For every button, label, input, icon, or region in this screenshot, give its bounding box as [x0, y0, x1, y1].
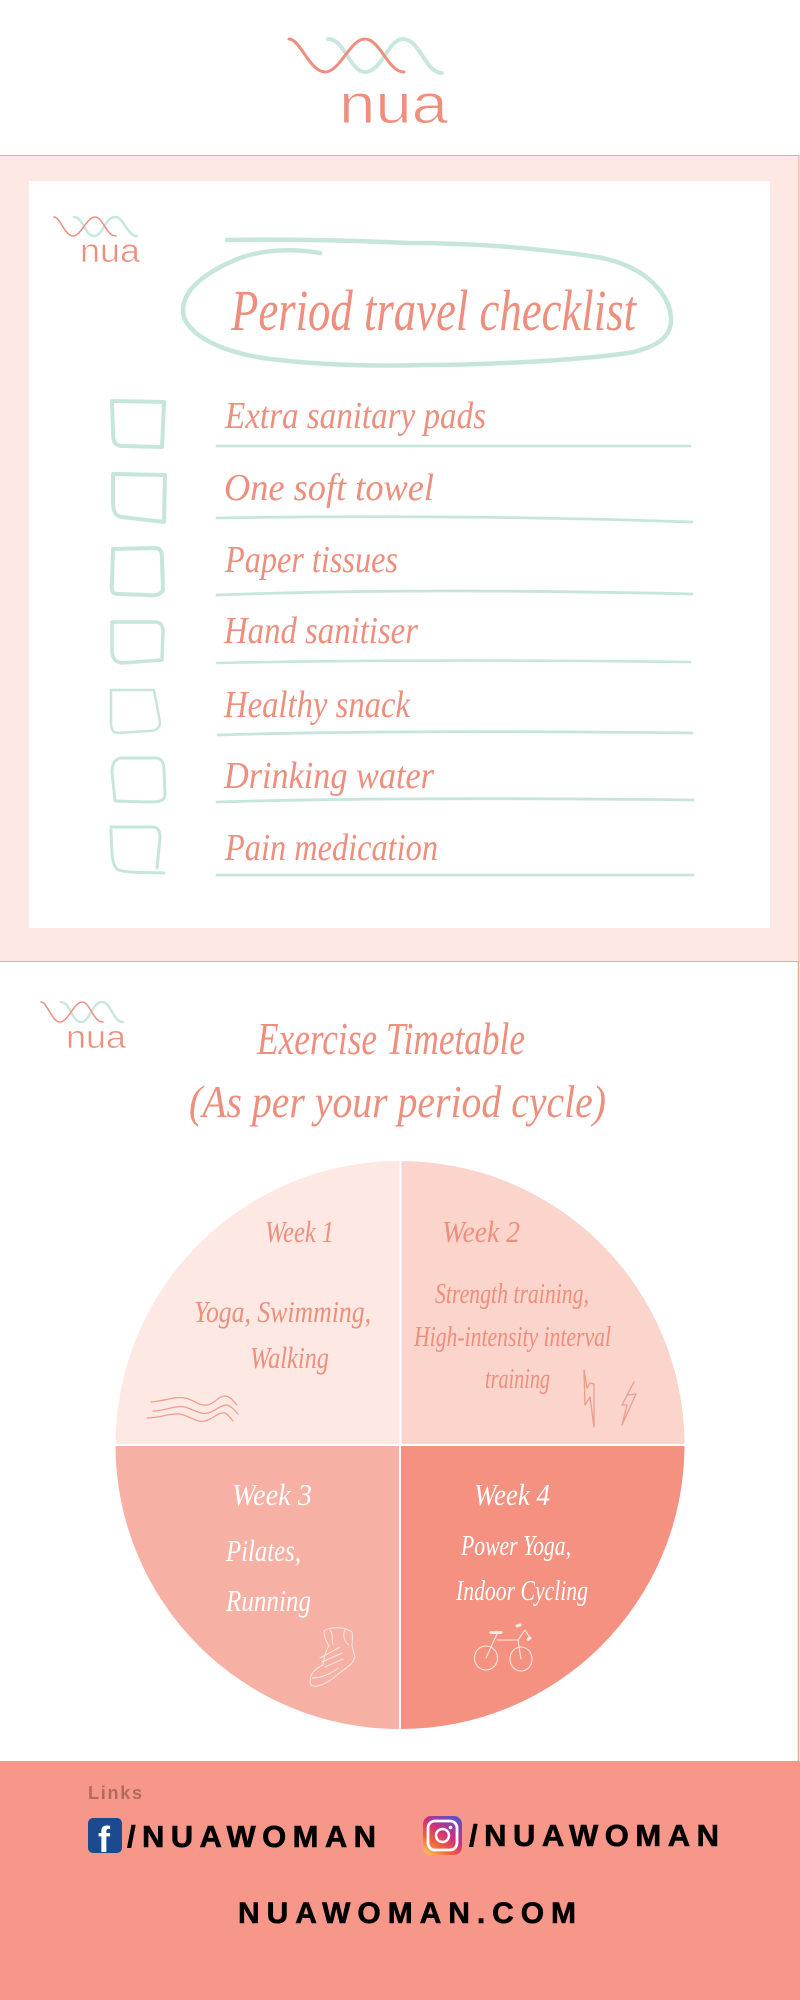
segment: week 1 — [116, 1161, 400, 1444]
title outline scribble — [183, 240, 671, 365]
facebook handle: /NUAWOMAN — [127, 1819, 376, 1854]
segment: week 4 — [401, 1446, 684, 1729]
segment: week 3: Running — [225, 1583, 311, 1618]
segment: week 2: High-intensity interval — [413, 1321, 611, 1353]
small logo: checklist: nua — [80, 232, 141, 269]
checklist item: Extra sanitary pads — [112, 395, 690, 447]
checklist item: Drinking water — [112, 755, 693, 802]
icon: facebook — [88, 1818, 122, 1860]
segment: week 3: Pilates, — [225, 1533, 301, 1568]
segment: week 1: Yoga, Swimming, — [194, 1294, 371, 1329]
checklist item: Drinking water: Drinking water — [223, 755, 434, 797]
exercise heading: Exercise Timetable — [256, 1013, 525, 1064]
pie chart: exercise by week — [116, 1161, 684, 1729]
checklist item: Pain medication: Pain medication — [224, 827, 438, 869]
segment: week 1: Walking — [250, 1340, 329, 1375]
checklist item: One soft towel: One soft towel — [224, 467, 434, 509]
checklist item: Paper tissues — [112, 539, 692, 595]
segment: week 2: Strength training, — [435, 1278, 589, 1310]
exercise heading: (As per your period cycle) — [189, 1076, 606, 1127]
footer band — [0, 1761, 800, 2000]
header logo — [289, 39, 449, 135]
segment: week 2: Week 2 — [442, 1214, 520, 1249]
icon: instagram — [423, 1816, 462, 1855]
right border: exercise section — [798, 962, 800, 1761]
segment: week 3: Week 3 — [232, 1477, 312, 1512]
segment: week 4: Power Yoga, — [460, 1530, 571, 1562]
checklist item: Hand sanitiser — [112, 610, 690, 663]
panel: period travel checklist — [0, 155, 800, 962]
small logo: exercise — [41, 1002, 126, 1055]
icon: running shoe — [310, 1628, 355, 1686]
small logo: checklist — [54, 217, 141, 269]
checklist item: Healthy snack: Healthy snack — [223, 684, 411, 726]
exercise heading — [189, 1013, 606, 1127]
small logo: exercise: nua — [66, 1019, 126, 1055]
segment: week 3 — [116, 1446, 399, 1729]
checklist title: Period travel checklist — [230, 278, 637, 343]
checklist item: Hand sanitiser: Hand sanitiser — [223, 610, 418, 652]
icon: bicycle — [474, 1625, 532, 1671]
icon: waves — [147, 1396, 238, 1421]
instagram handle: /NUAWOMAN — [469, 1818, 719, 1853]
links label: Links — [88, 1783, 142, 1803]
checklist item: One soft towel — [113, 467, 692, 522]
checklist item: Paper tissues: Paper tissues — [224, 539, 398, 581]
website: NUAWOMAN.COM — [238, 1897, 576, 1930]
segment: week 4: Indoor Cycling — [455, 1575, 588, 1607]
segment: week 1: Week 1 — [265, 1214, 334, 1249]
checklist item: Pain medication — [111, 827, 693, 875]
segment: week 2 — [402, 1161, 684, 1444]
checklist item: Extra sanitary pads: Extra sanitary pads — [224, 395, 486, 437]
checklist item: Healthy snack — [111, 684, 692, 735]
segment: week 4: Week 4 — [474, 1477, 550, 1512]
icon: facebook: f — [98, 1819, 111, 1860]
icon: lightning bolts — [584, 1370, 636, 1427]
header logo: nua — [339, 72, 449, 135]
segment: week 2: training — [485, 1363, 550, 1395]
